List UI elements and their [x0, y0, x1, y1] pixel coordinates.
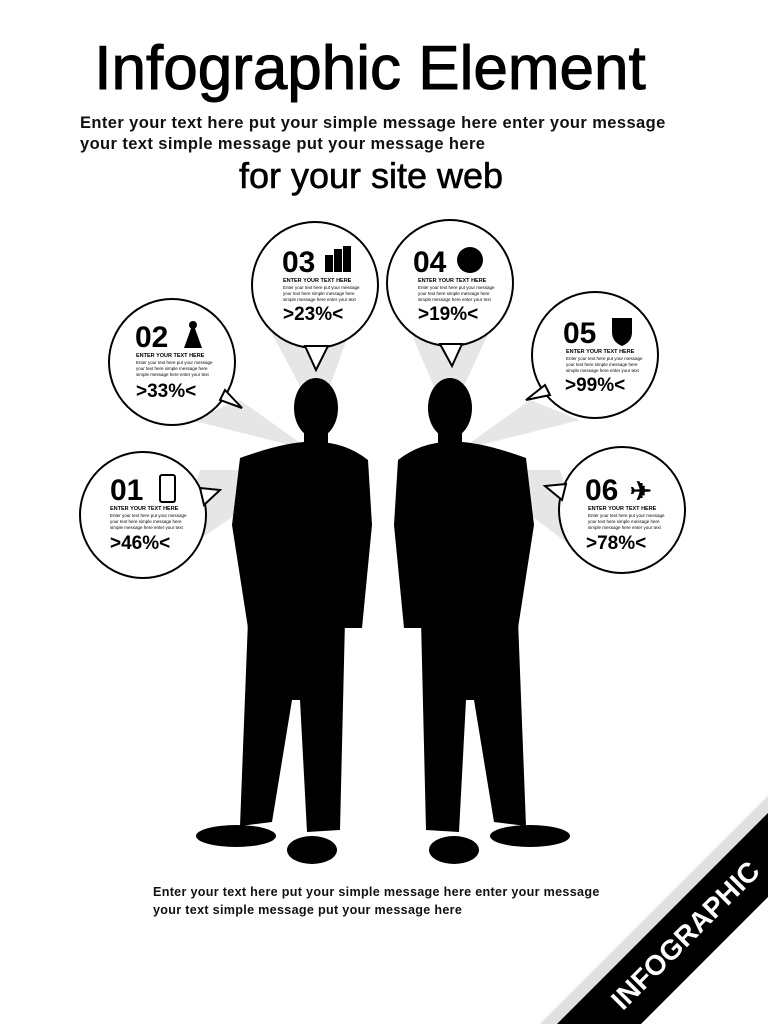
light rays [170, 330, 590, 560]
bubble 04: ENTER YOUR TEXT HERE [418, 278, 487, 284]
bubble 05: your text here simple message here [566, 362, 638, 367]
bubble 02: 02 [135, 321, 168, 354]
footer text: Enter your text here put your simple message here enter your message [153, 885, 600, 899]
bubble 01: simple message here enter your text [110, 525, 184, 530]
bubble 05: simple message here enter your text [566, 368, 640, 373]
bubble 01: ENTER YOUR TEXT HERE [110, 506, 179, 512]
bubble 06: 06 [585, 474, 618, 507]
bubble 05: ENTER YOUR TEXT HERE [566, 349, 635, 355]
bubble 02: ENTER YOUR TEXT HERE [136, 353, 205, 359]
bubble 02 [109, 299, 242, 425]
bubble 01: >46%< [110, 533, 170, 554]
intro text: your text simple message put your message here [80, 135, 485, 153]
bubble 05: 05 [563, 317, 596, 350]
bubble 06: >78%< [586, 533, 646, 554]
bubble 04: 04 [413, 246, 447, 279]
bubble 04: >19%< [418, 304, 478, 325]
bubble 05 [526, 292, 658, 418]
bubble 04 [387, 220, 513, 366]
bubble 03: 03 [282, 246, 315, 279]
bubble 05: >99%< [565, 375, 625, 396]
subtitle: for your site web [239, 155, 503, 196]
bubble 03: your text here simple message here [283, 291, 355, 296]
bubble 04: your text here simple message here [418, 291, 490, 296]
bubble 03: ENTER YOUR TEXT HERE [283, 278, 352, 284]
bubble 03: simple message here enter your text [283, 297, 357, 302]
bubble 05: Enter your text here put your message [566, 356, 643, 361]
title: Infographic Element [94, 34, 646, 103]
bubble 02: simple message here enter your text [136, 372, 210, 377]
bubble 04: Enter your text here put your message [418, 285, 495, 290]
corner ribbon: INFOGRAPHIC [605, 855, 766, 1016]
silhouette: right man [394, 378, 570, 864]
bubble 06: your text here simple message here [588, 519, 660, 524]
bubble 01 [80, 452, 220, 578]
bubble 02: your text here simple message here [136, 366, 208, 371]
bubble 02: Enter your text here put your message [136, 360, 213, 365]
silhouette: left man [196, 378, 372, 864]
intro text [80, 114, 666, 153]
bubble 06: ✈ [630, 476, 652, 506]
bubble 06 [545, 447, 685, 573]
bubble 06: Enter your text here put your message [588, 513, 665, 518]
bubble 04: simple message here enter your text [418, 297, 492, 302]
bubble 01: 01 [110, 474, 143, 507]
bubble 03: >23%< [283, 304, 343, 325]
bubble 06: ENTER YOUR TEXT HERE [588, 506, 657, 512]
footer text [153, 885, 600, 917]
bubble 06: simple message here enter your text [588, 525, 662, 530]
footer text: your text simple message put your message here [153, 903, 462, 917]
bubble 01: Enter your text here put your message [110, 513, 187, 518]
corner ribbon [540, 796, 768, 1024]
bubble 03 [252, 222, 378, 370]
bubble 01: your text here simple message here [110, 519, 182, 524]
intro text: Enter your text here put your simple message here enter your message [80, 114, 666, 132]
bubble 02: >33%< [136, 381, 196, 402]
bubble 03: Enter your text here put your message [283, 285, 360, 290]
